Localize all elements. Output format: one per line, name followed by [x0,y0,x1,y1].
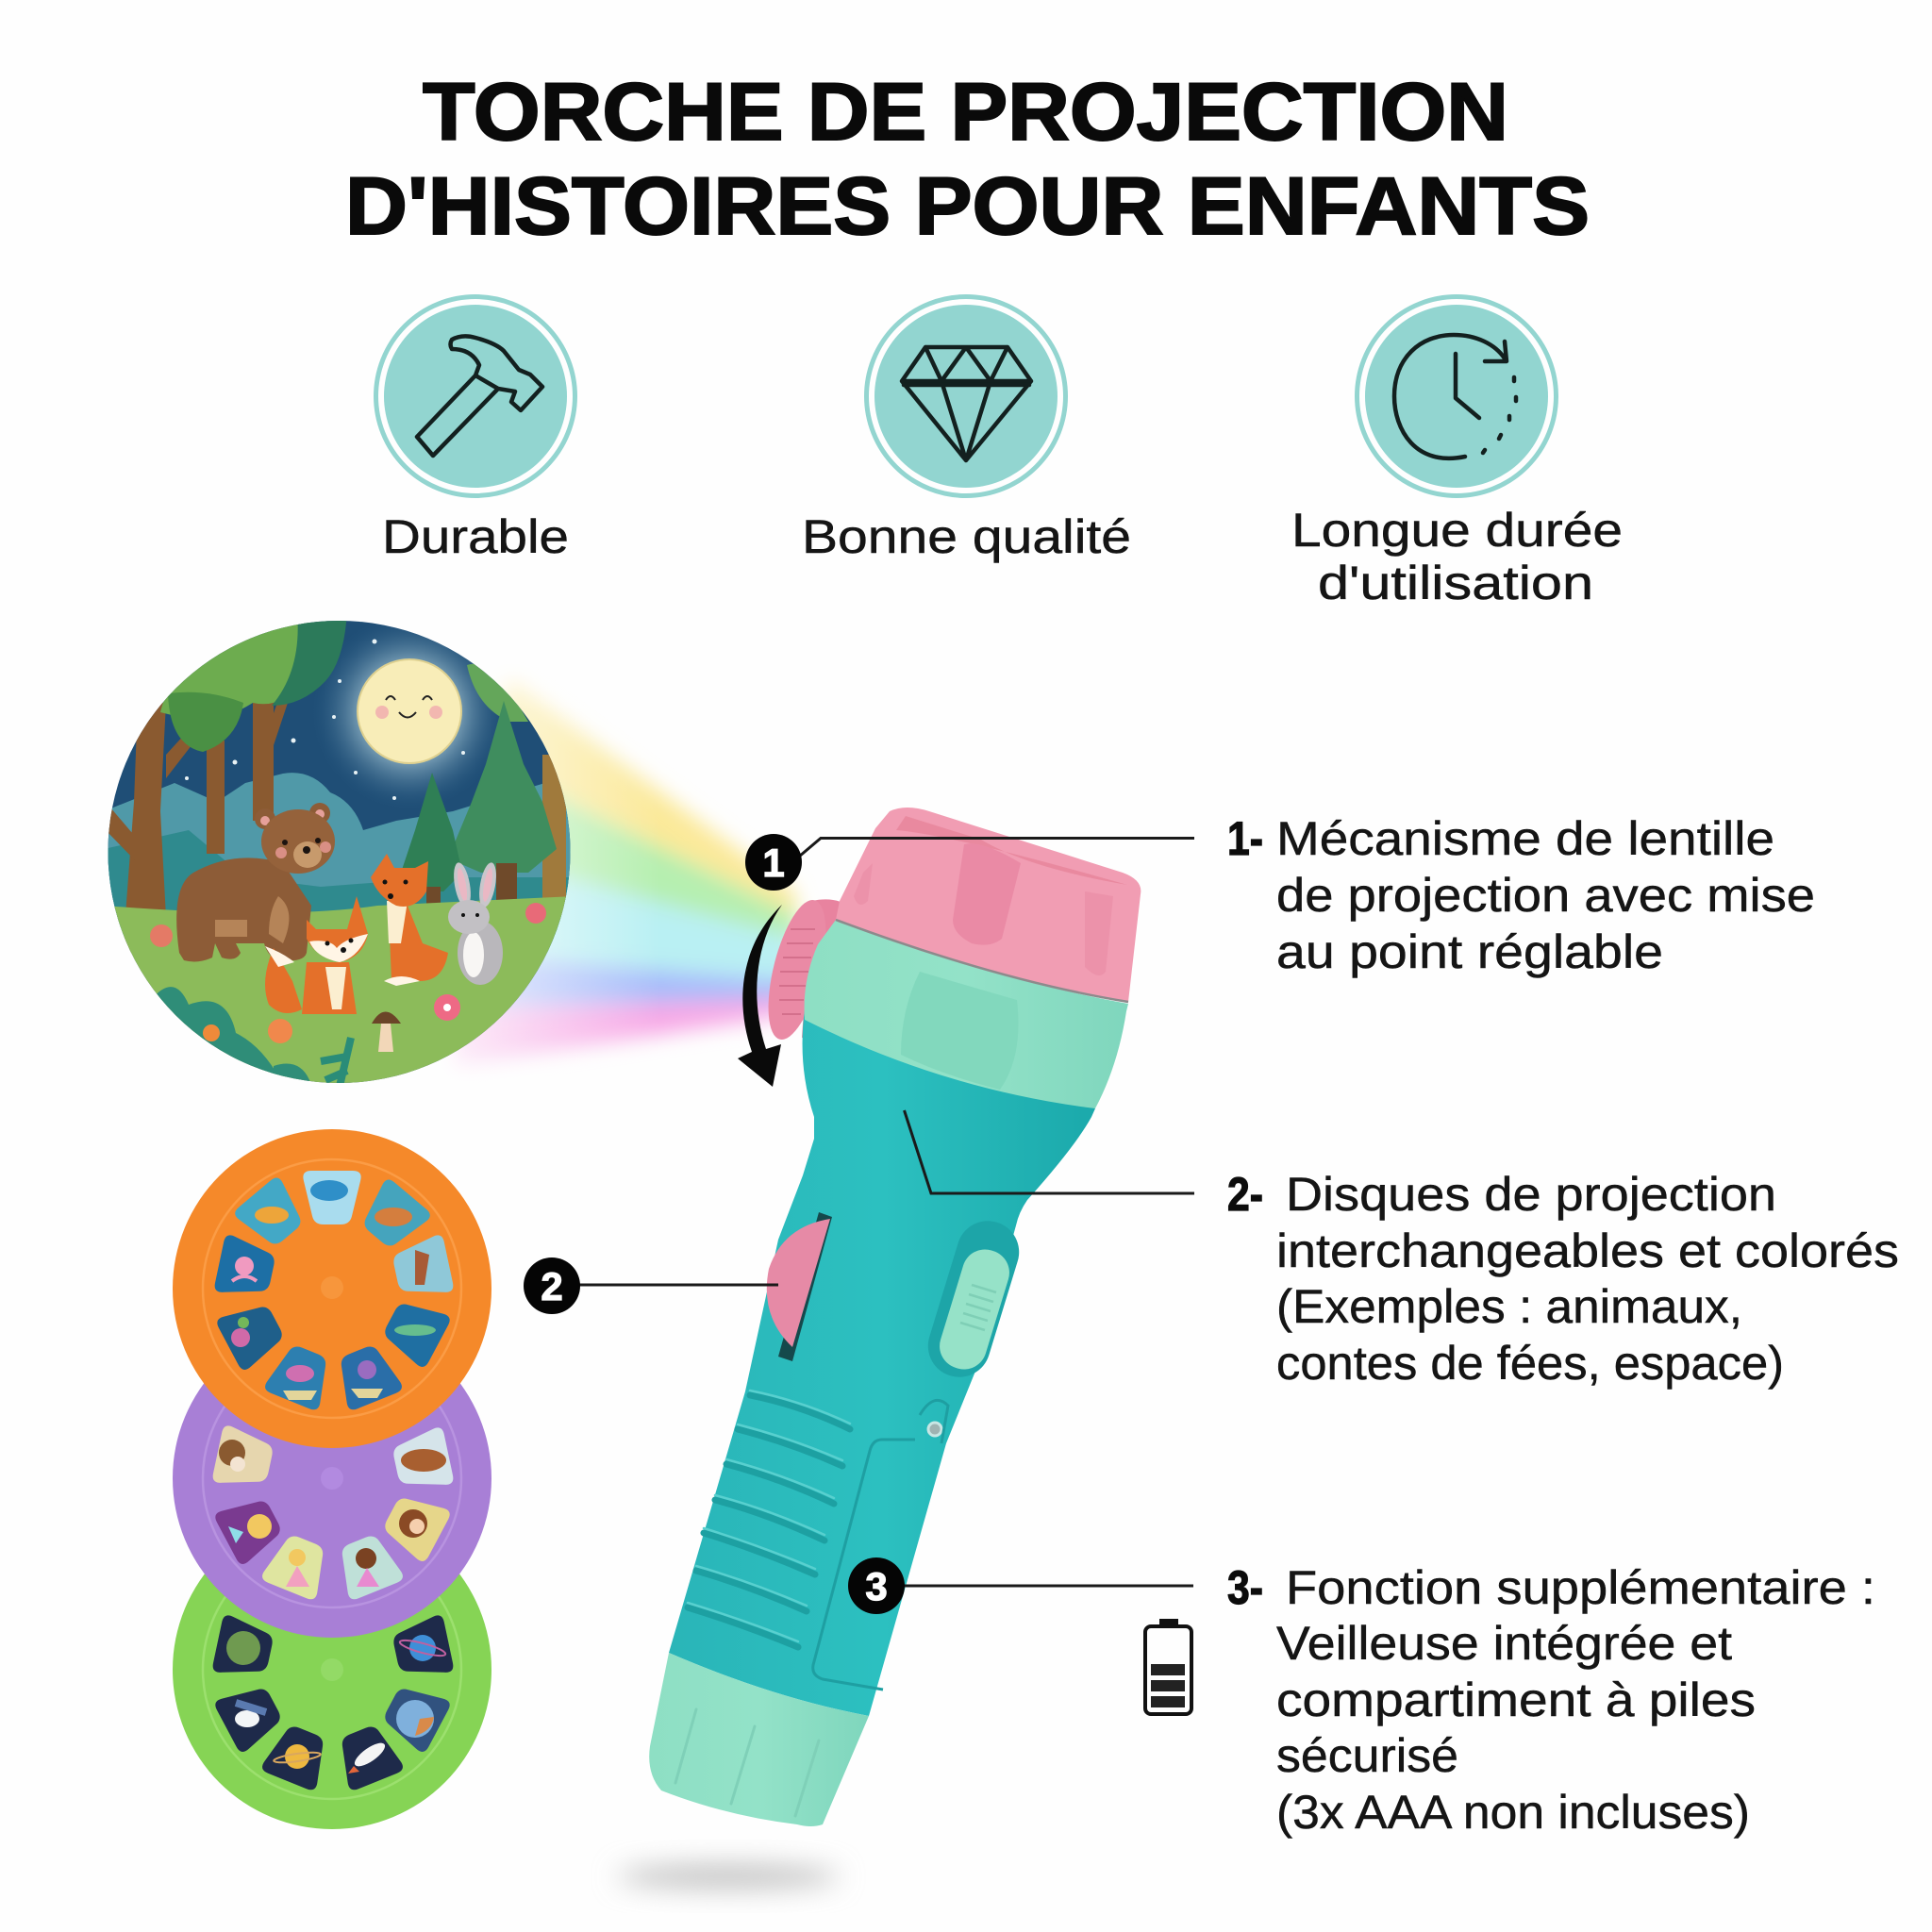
mint collar [805,920,1128,1108]
text block 3: extra function: Fonction supplémentaire : [1286,1561,1875,1614]
meadow [104,896,575,1085]
text block 2: discs: interchangeables et colorés [1276,1224,1899,1277]
mushroom and flowers [150,903,546,1094]
fox front [265,896,368,1014]
title: D'HISTOIRES POUR ENFANTS [345,161,1590,252]
flashlight body [669,1009,1095,1716]
pink head [836,808,1141,1002]
text block 1: lens mechanism: au point réglable [1276,925,1663,978]
focus wheel [757,894,847,1045]
badge 1: 1 [762,841,785,885]
label: longue duree: d'utilisation [1318,557,1593,609]
stars [185,640,465,800]
badge 3 [848,1557,905,1614]
icon: battery [1145,1619,1191,1714]
tree trunks [108,702,566,953]
label: longue duree: Longue durée [1291,504,1623,557]
text block 3: extra function: 3- [1227,1561,1263,1614]
rabbit [448,861,503,985]
ground shadow [617,1864,840,1889]
feature: bonne qualite [802,296,1131,563]
text block 2: discs: (Exemples : animaux, [1276,1280,1742,1333]
feature: durable [375,296,575,563]
badge 1 [745,834,802,891]
disc: orange ocean [173,1129,491,1448]
background hills [104,773,575,953]
foliage [160,611,528,752]
battery door [813,1400,948,1690]
label: longue duree [1291,504,1623,609]
callout 2 disc leader line [575,1283,778,1287]
title [345,67,1590,252]
text block 2: discs: Disques de projection [1286,1168,1776,1221]
text block 1: lens mechanism [1227,812,1815,978]
text block 2: discs: contes de fées, espace) [1276,1337,1784,1390]
bushes [151,987,311,1085]
title: TORCHE DE PROJECTION [423,67,1508,158]
badge 2: 2 [541,1264,563,1308]
badge 3: 3 [865,1564,888,1608]
badge 2 [524,1257,580,1314]
moon [358,659,461,763]
callout 3: leader line [896,1585,1193,1587]
grip ribs [688,1391,850,1647]
text block 3: extra function: (3x AAA non incluses) [1276,1786,1750,1839]
fox back [371,854,448,986]
text block 1: lens mechanism: Mécanisme de lentille [1276,812,1774,865]
text block 3: extra function: compartiment à piles [1276,1674,1756,1726]
disc stack [173,1129,491,1829]
disc: green space [173,1510,491,1829]
flashlight [649,808,1141,1826]
text block 3: extra function: Veilleuse intégrée et [1276,1617,1732,1670]
text block 3: extra function [1227,1561,1875,1839]
label: durable: Durable [382,510,569,563]
icon: clock [1357,296,1557,496]
disc slot and pink disc [767,1212,832,1361]
curved rotation arrow [738,905,782,1087]
callout 1: leader line [799,838,1194,857]
bear [176,803,335,961]
feature: longue duree [1291,296,1623,609]
pine trees [401,701,557,909]
projected image: forest scene [104,611,575,1094]
callout 2: leader line [904,1110,1194,1193]
label: bonne qualite: Bonne qualité [802,510,1131,563]
bottom cap [649,1653,869,1826]
disc: purple fairy tales [173,1319,491,1638]
slide switch [921,1213,1026,1385]
projection light beam [425,651,797,1104]
text block 2: discs: 2- [1227,1168,1263,1221]
text block 1: lens mechanism: 1- [1227,812,1263,865]
text block 3: extra function: sécurisé [1276,1729,1458,1782]
icon: diamond [866,296,1066,496]
text block 1: lens mechanism: de projection avec mise [1276,869,1815,922]
icon: hammer [375,296,575,496]
text block 2: discs [1227,1168,1899,1390]
